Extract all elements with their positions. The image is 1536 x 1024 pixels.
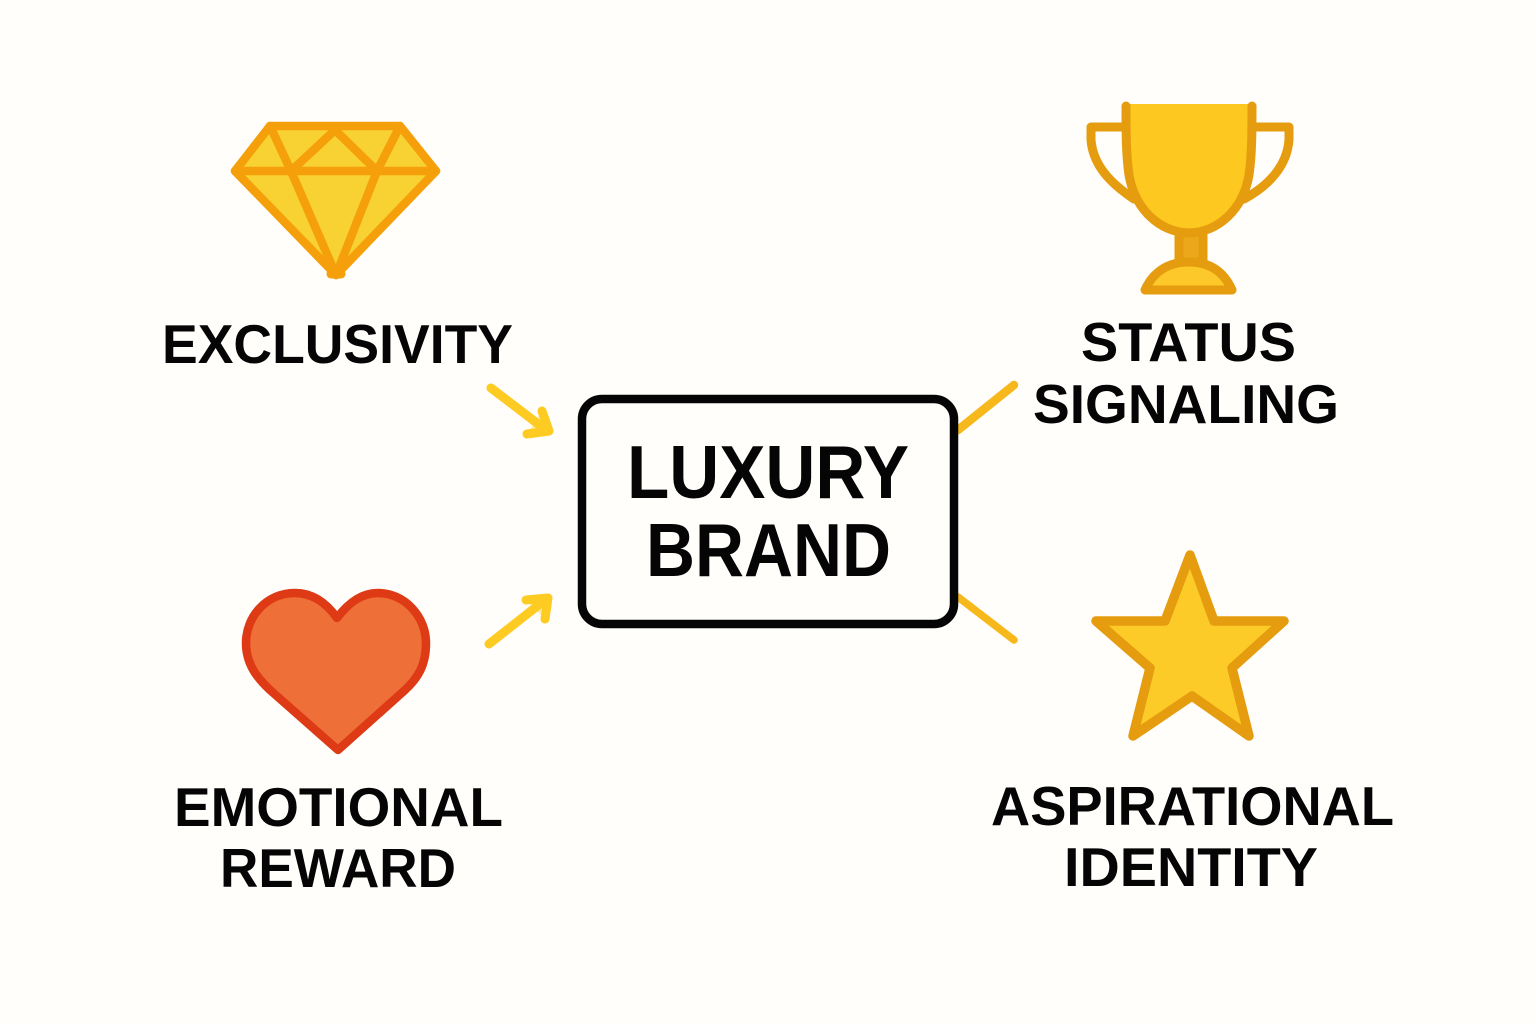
label: emotional reward: REWARD (220, 837, 456, 899)
label: aspirational identity (991, 775, 1394, 898)
icon: heart (246, 593, 426, 750)
label: exclusivity: EXCLUSIVITY (162, 313, 513, 375)
label: aspirational identity: IDENTITY (1064, 836, 1318, 898)
arrow: exclusivity to brand (491, 388, 549, 434)
connector: status signaling (958, 385, 1014, 430)
icon: star (1096, 555, 1284, 736)
label: status signaling: STATUS (1081, 311, 1296, 373)
label: aspirational identity: ASPIRATIONAL (991, 775, 1394, 837)
label: emotional reward: EMOTIONAL (174, 776, 503, 838)
icon: trophy (1091, 104, 1289, 290)
center box title: BRAND (646, 508, 891, 592)
label: status signaling (1033, 311, 1339, 435)
center box title: LUXURY (627, 430, 909, 514)
center box: luxury brand (582, 399, 954, 624)
connector: aspirational identity (958, 597, 1014, 640)
label: emotional reward (174, 776, 503, 899)
label: status signaling: SIGNALING (1033, 373, 1339, 435)
icon: diamond (235, 126, 436, 275)
arrow: emotional reward to brand (489, 598, 548, 644)
center box title (627, 430, 909, 592)
